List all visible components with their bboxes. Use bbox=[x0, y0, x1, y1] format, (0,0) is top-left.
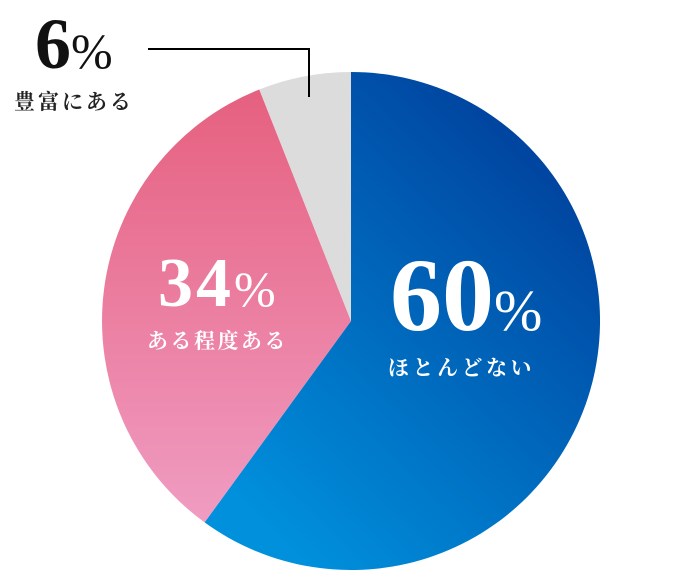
pie chart bbox=[102, 72, 600, 570]
label: 6% 豊富にある: 6% bbox=[35, 4, 113, 84]
label: 60% ほとんどない: 60% bbox=[390, 238, 542, 353]
slice: 60% ほとんどない bbox=[205, 72, 600, 570]
label: 6% 豊富にある: 豊富にある bbox=[14, 90, 134, 114]
label: 60% ほとんどない: ほとんどない bbox=[388, 356, 535, 380]
label: 34% ある程度ある: ある程度ある bbox=[147, 329, 288, 353]
slice: 34% ある程度ある bbox=[102, 90, 351, 522]
slice: 6% 豊富にある bbox=[259, 72, 351, 321]
label: 34% ある程度ある: 34% bbox=[158, 245, 276, 322]
label: 34% ある程度ある bbox=[147, 245, 288, 353]
label: 6% 豊富にある bbox=[14, 4, 134, 114]
leader line bbox=[148, 49, 309, 97]
